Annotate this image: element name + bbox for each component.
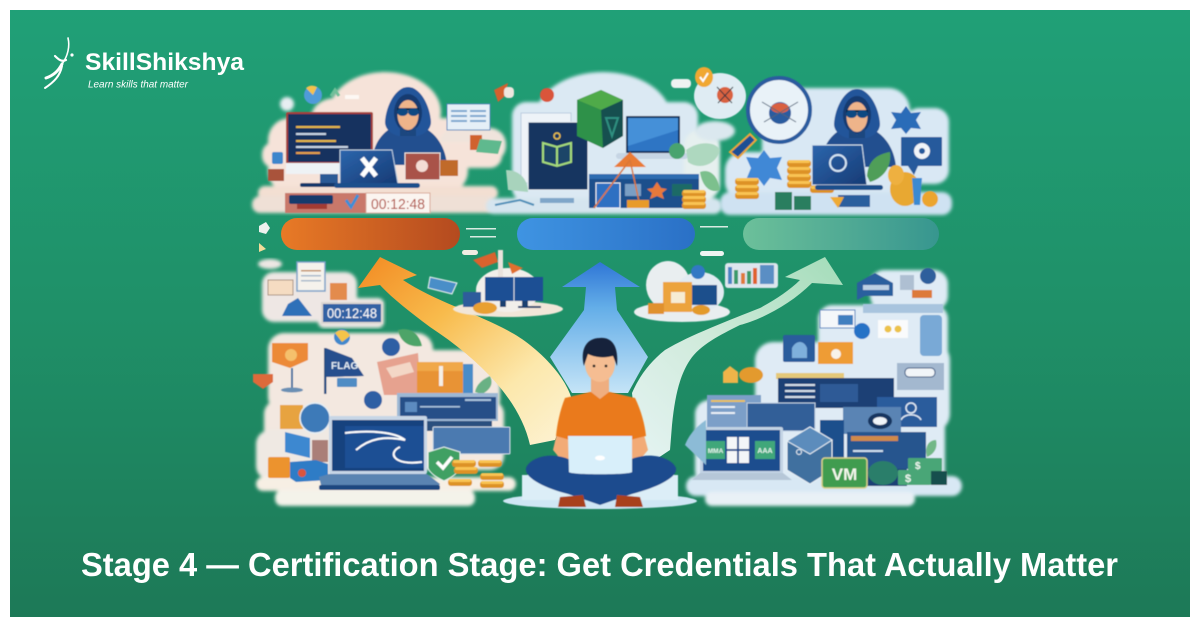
grad hat bbox=[282, 298, 312, 316]
tags bbox=[838, 195, 870, 207]
shoes bbox=[558, 495, 586, 507]
flag: FLAG bbox=[331, 361, 358, 372]
blue console bbox=[820, 420, 926, 486]
treasure chest bbox=[417, 362, 473, 394]
gold box bbox=[280, 405, 303, 429]
cloud backdrop bbox=[258, 259, 384, 328]
coins bbox=[448, 460, 504, 488]
speech panel bbox=[857, 273, 893, 300]
umbrella bbox=[594, 152, 646, 208]
dollar bills bbox=[898, 458, 947, 485]
label pill: orange bbox=[281, 218, 460, 250]
orange card bbox=[818, 342, 853, 364]
bar chart panel bbox=[725, 263, 778, 288]
label pill: green bbox=[743, 218, 939, 250]
laptop bbox=[616, 116, 688, 159]
round badge bbox=[300, 403, 330, 433]
heart sign bbox=[253, 374, 273, 389]
hooded hacker bbox=[372, 87, 447, 165]
monitor bbox=[286, 112, 373, 187]
leaves bbox=[926, 440, 937, 457]
lock bbox=[268, 457, 290, 478]
mid panel bbox=[747, 403, 815, 431]
logo bbox=[45, 38, 245, 90]
blue box bbox=[783, 335, 815, 362]
box bbox=[663, 282, 692, 312]
check coin bbox=[695, 67, 713, 87]
icon: leaping figure bbox=[45, 38, 74, 88]
illustration: middle-right storage island bbox=[634, 261, 778, 322]
orange sign bbox=[272, 343, 308, 392]
blue panel bbox=[433, 427, 510, 454]
brand name: SkillShikshya bbox=[85, 49, 245, 76]
document panel bbox=[447, 104, 490, 130]
message cards bbox=[470, 135, 482, 150]
island bbox=[453, 301, 563, 317]
card bbox=[820, 310, 855, 328]
neck bbox=[591, 376, 609, 399]
timer: 00:12:48 bbox=[371, 197, 425, 213]
laptop bbox=[692, 427, 792, 480]
red badge bbox=[405, 153, 440, 180]
bubble bbox=[694, 73, 746, 119]
person with laptop bbox=[503, 338, 697, 509]
magnifying glass bbox=[730, 78, 810, 158]
left panel bbox=[707, 395, 761, 429]
coins bbox=[692, 305, 710, 315]
green box bbox=[577, 90, 623, 148]
book tablet bbox=[528, 122, 588, 190]
colourful scraps bbox=[495, 200, 534, 205]
blue box bbox=[290, 460, 328, 482]
cloud backdrop bbox=[256, 333, 516, 506]
eyes bbox=[593, 365, 595, 367]
search panel bbox=[877, 397, 937, 427]
chip bbox=[897, 363, 944, 390]
plus badge bbox=[854, 323, 870, 339]
flags bbox=[473, 252, 498, 268]
illustration: left CTF cluster bbox=[253, 329, 516, 506]
keypad bbox=[920, 315, 942, 356]
leaves bbox=[867, 152, 890, 182]
yellow dot panel bbox=[878, 320, 908, 338]
illustration: top-right bug hunting cluster bbox=[695, 78, 952, 215]
cloud backdrop bbox=[695, 88, 952, 215]
dollar bills: $ bbox=[915, 461, 921, 472]
header bar bbox=[863, 304, 943, 313]
navy panel bbox=[397, 393, 498, 421]
label pill: blue bbox=[517, 218, 695, 250]
leaf bbox=[398, 329, 422, 346]
monitor bbox=[692, 285, 717, 305]
flag badge bbox=[494, 83, 508, 102]
VM badge bbox=[822, 458, 867, 488]
arrow: green curved bbox=[632, 257, 843, 470]
link panel bbox=[843, 407, 901, 434]
orange square bbox=[330, 283, 347, 300]
legs bbox=[526, 456, 676, 505]
cloud backdrop bbox=[686, 270, 962, 506]
island bbox=[634, 302, 730, 322]
leaves bbox=[686, 143, 720, 166]
arrow: orange curved bbox=[358, 257, 572, 445]
blue card bbox=[285, 432, 310, 458]
lock and coins bbox=[723, 366, 738, 383]
dark code panel bbox=[776, 373, 894, 408]
monitors bbox=[485, 277, 543, 301]
bug bbox=[717, 87, 733, 103]
green money bbox=[775, 192, 792, 210]
laptop bbox=[568, 436, 632, 474]
shadow ellipse bbox=[503, 493, 697, 509]
coins bbox=[473, 302, 497, 314]
illustration: top-centre learning cluster bbox=[486, 72, 722, 214]
hair bbox=[583, 338, 617, 366]
clipboard bbox=[297, 262, 325, 291]
VM badge: VM bbox=[832, 465, 857, 484]
cloud backdrop bbox=[252, 72, 506, 213]
shield bbox=[428, 447, 460, 481]
arms bbox=[553, 420, 580, 468]
laptop bbox=[812, 145, 883, 190]
small panel bbox=[268, 280, 293, 295]
card bbox=[428, 277, 457, 294]
illustration: bug bubble bbox=[671, 67, 746, 119]
title: Stage 4 — Certification Stage: Get Credentials That Actually Matter bbox=[81, 546, 1118, 583]
flag bbox=[324, 348, 364, 394]
tagline: Learn skills that matter bbox=[88, 78, 188, 90]
dollar bills: $ bbox=[905, 473, 911, 485]
pie badge bbox=[304, 86, 322, 104]
globe bbox=[334, 329, 350, 345]
arrow: blue upward bbox=[550, 262, 648, 393]
coins bbox=[682, 190, 706, 209]
face bbox=[585, 346, 615, 382]
server bbox=[900, 275, 914, 290]
storefront bbox=[589, 174, 699, 208]
illustration: top-left hacker cluster bbox=[252, 72, 506, 213]
shirt bbox=[556, 392, 646, 450]
white speckles bbox=[331, 90, 339, 96]
illustration: middle-left monitor island bbox=[428, 250, 563, 317]
timer: 00:12:48 bbox=[327, 306, 377, 321]
hooded hacker bbox=[821, 89, 896, 167]
gear bbox=[382, 338, 400, 356]
coin stack bbox=[868, 461, 898, 485]
laptop: MMA bbox=[708, 448, 724, 455]
laptop: AAA bbox=[757, 448, 773, 455]
kali laptop bbox=[319, 416, 440, 490]
cloud backdrop bbox=[486, 72, 722, 214]
speech bubble bbox=[901, 137, 942, 175]
check strip bbox=[285, 193, 370, 213]
coins bbox=[735, 160, 834, 199]
blue star bbox=[746, 150, 782, 186]
back document bbox=[521, 113, 571, 183]
cube bbox=[787, 427, 832, 484]
laptop bbox=[334, 150, 420, 188]
illustration: left timer cluster bbox=[258, 259, 384, 328]
pink envelope bbox=[377, 353, 421, 395]
small floating marks bbox=[259, 222, 728, 256]
gear bbox=[920, 268, 936, 284]
gold figure bbox=[888, 165, 938, 207]
icon: gear bbox=[691, 265, 705, 279]
illustration: right VM lab cluster bbox=[685, 268, 962, 506]
